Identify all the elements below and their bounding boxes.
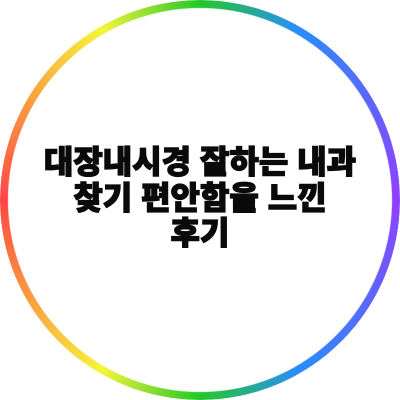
title: 후기 [171, 215, 229, 251]
title: 대장내시경 잘하는 내과 [44, 144, 356, 180]
title: 찾기 편안함을 느낀 [73, 180, 327, 216]
title [44, 144, 356, 251]
